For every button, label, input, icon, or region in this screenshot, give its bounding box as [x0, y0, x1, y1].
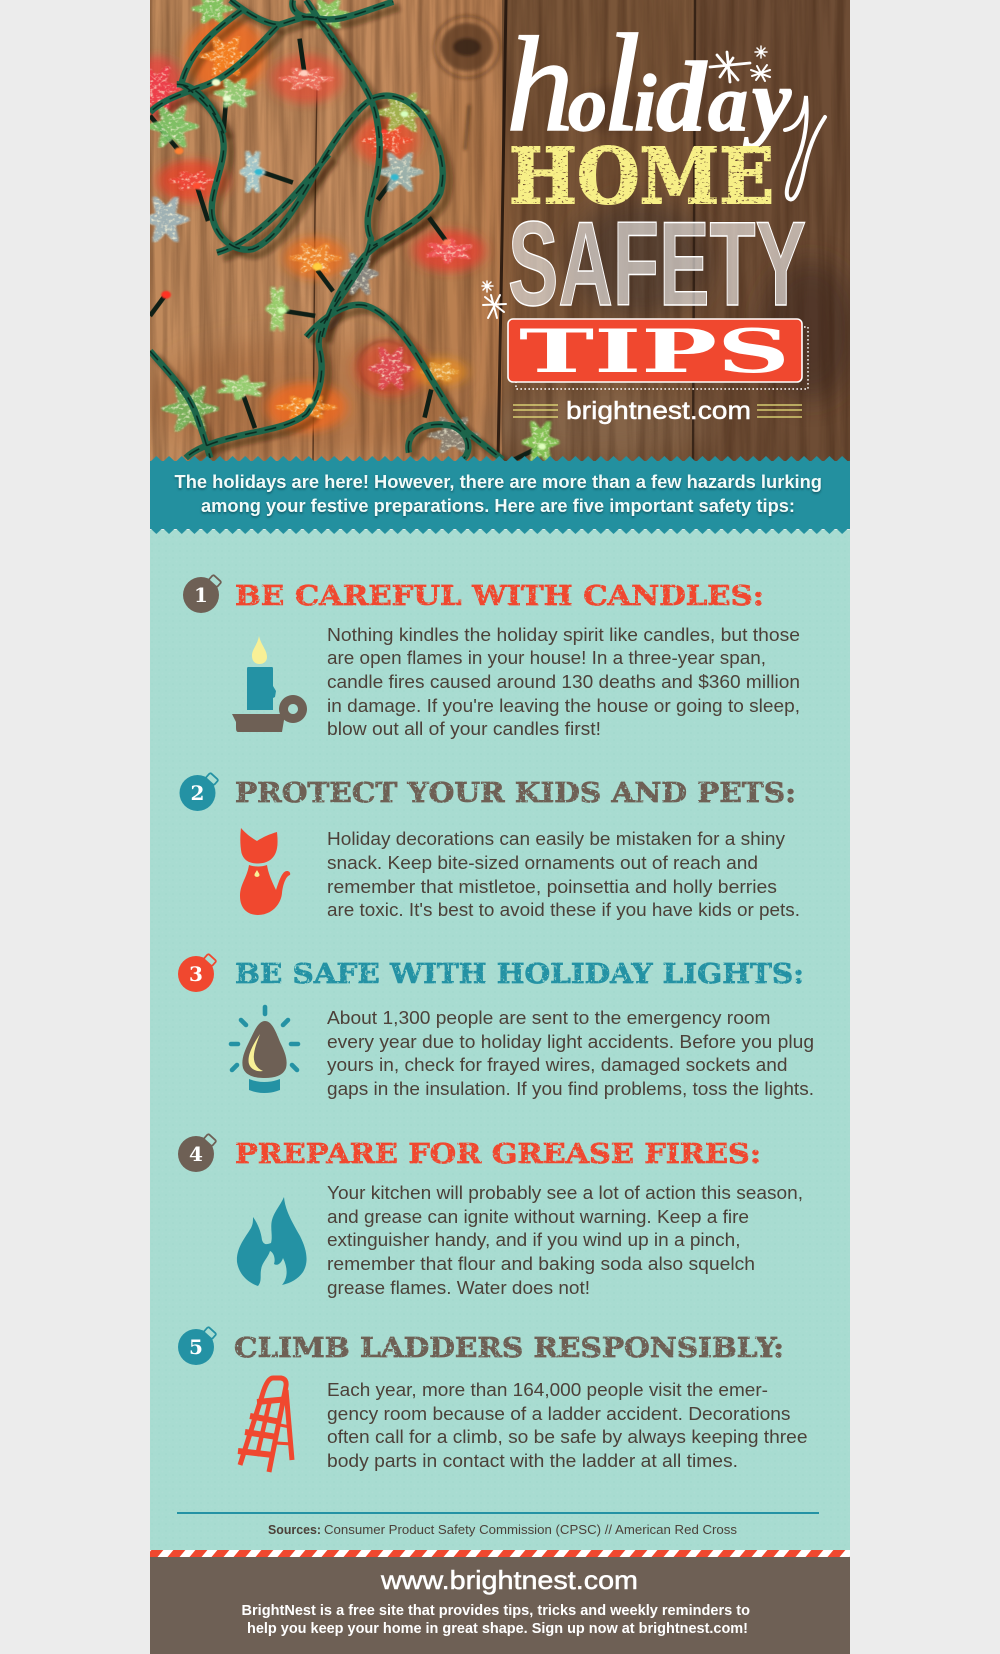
icon: cat: [240, 828, 290, 915]
title: TIPS badge: [508, 317, 808, 389]
body text 3: gaps in the insulation. If you find problems, toss the lights.: [327, 1078, 814, 1099]
body text 4: Your kitchen will probably see a lot of action this season,: [327, 1182, 803, 1203]
body text 1: [327, 624, 800, 739]
icon: large asterisk sparkles near holiday: [710, 46, 770, 82]
title: holiday: [506, 6, 825, 199]
intro banner: [150, 456, 850, 534]
body text 4: grease flames. Water does not!: [327, 1277, 590, 1298]
title: holiday: o: [568, 60, 607, 147]
title: holiday: d: [656, 41, 708, 152]
panel: tip 1 candles: [183, 575, 800, 739]
body text 1: candle fires caused around 130 deaths and $360 million: [327, 671, 800, 692]
knots in the wood: [359, 16, 500, 389]
body text 2: are toxic. It's best to avoid these if you have kids or pets.: [327, 899, 800, 920]
body text 5: body parts in contact with the ladder at all times.: [327, 1450, 738, 1471]
number badge 3: [178, 954, 216, 992]
number badge 2: [180, 773, 218, 811]
icon: step ladder: [238, 1378, 292, 1472]
body text 5: gency room because of a ladder accident. Decorations: [327, 1403, 790, 1424]
body text 5: Each year, more than 164,000 people visit the emer-: [327, 1379, 768, 1400]
body text 3: yours in, check for frayed wires, damaged sockets and: [327, 1054, 788, 1075]
number badge 4: 4: [189, 1142, 203, 1166]
footer blurb: BrightNest is a free site that provides tips, tricks and weekly reminders to: [242, 1602, 750, 1619]
body text 4: [327, 1182, 803, 1298]
sources line: Sources:: [268, 1522, 321, 1537]
icon: light bulb: [231, 1007, 298, 1093]
website label in header: brightnest.com: [566, 397, 751, 425]
number badge 1: [183, 575, 221, 613]
body text 1: in damage. If you're leaving the house or going to sleep,: [327, 695, 800, 716]
light stems: [150, 39, 543, 460]
website label in header: [513, 397, 802, 425]
body text 2: [327, 828, 800, 920]
footer panel: [150, 1557, 850, 1654]
icon: candle: [232, 636, 307, 732]
heading 4: PREPARE FOR GREASE FIRES:: [235, 1138, 761, 1170]
heading 5: CLIMB LADDERS RESPONSIBLY:: [234, 1332, 784, 1364]
title: holiday: i: [634, 60, 656, 148]
intro banner: The holidays are here! However, there are more than a few hazards lurking: [174, 471, 822, 492]
body text 1: are open flames in your house! In a three-year span,: [327, 647, 766, 668]
body text 1: blow out all of your candles first!: [327, 718, 601, 739]
title: SAFETY: SAFETY: [508, 197, 806, 331]
body text 3: every year due to holiday light accidents. Before you plug: [327, 1031, 814, 1052]
sources line: Consumer Product Safety Commission (CPSC) // American Red Cross: [324, 1522, 738, 1537]
heading 2: PROTECT YOUR KIDS AND PETS:: [235, 777, 796, 809]
title: holiday: y: [743, 53, 792, 150]
title: holiday: h: [506, 10, 574, 160]
panel: tip 2 kids and pets: [180, 773, 800, 920]
body text 5: [327, 1379, 808, 1471]
glowing bulb centres: [161, 70, 546, 450]
body text 3: About 1,300 people are sent to the emergency room: [327, 1007, 770, 1028]
number badge 5: [178, 1327, 216, 1365]
body text 3: [327, 1007, 814, 1099]
footer website: www.brightnest.com: [380, 1565, 638, 1595]
snowflake light bulbs: [135, 0, 558, 462]
title: TIPS badge: TIPS: [519, 317, 790, 387]
footer blurb: help you keep your home in great shape. Sign up now at brightnest.com!: [247, 1620, 748, 1637]
body text 2: remember that mistletoe, poinsettia and holly berries: [327, 876, 777, 897]
panel: mint content background: [150, 530, 850, 1557]
number badge 3: 3: [189, 962, 203, 986]
body text 4: extinguisher handy, and if you wind up in a pinch,: [327, 1229, 740, 1250]
body text 4: remember that flour and baking soda also squelch: [327, 1253, 755, 1274]
number badge 1: 1: [194, 583, 208, 607]
body text 2: snack. Keep bite-sized ornaments out of reach and: [327, 852, 758, 873]
heading 1: BE CAREFUL WITH CANDLES:: [235, 580, 764, 612]
title: holiday: l: [602, 6, 641, 161]
panel: tip 4 grease fires: [178, 1134, 803, 1298]
header photo: wooden planks with string lights: [130, 0, 860, 465]
number badge 2: 2: [191, 781, 204, 805]
footer blurb: [242, 1602, 750, 1637]
icon: flame: [237, 1197, 307, 1286]
panel: tip 3 holiday lights: [178, 954, 814, 1099]
panel: tip 5 ladders: [178, 1327, 808, 1472]
icon: small sparkles near SAFETY: [482, 281, 506, 318]
heading 3: BE SAFE WITH HOLIDAY LIGHTS:: [235, 958, 804, 990]
title: holiday: a: [708, 60, 748, 148]
intro banner: among your festive preparations. Here are five important safety tips:: [201, 495, 795, 516]
body text 1: Nothing kindles the holiday spirit like candles, but those: [327, 624, 800, 645]
number badge 5: 5: [189, 1335, 203, 1359]
title: HOME: HOME: [509, 132, 774, 222]
body text 2: Holiday decorations can easily be mistaken for a shiny: [327, 828, 786, 849]
body text 4: and grease can ignite without warning. Keep a fire: [327, 1206, 749, 1227]
number badge 4: [178, 1134, 216, 1172]
body text 5: often call for a climb, so be safe by always keeping three: [327, 1426, 808, 1447]
